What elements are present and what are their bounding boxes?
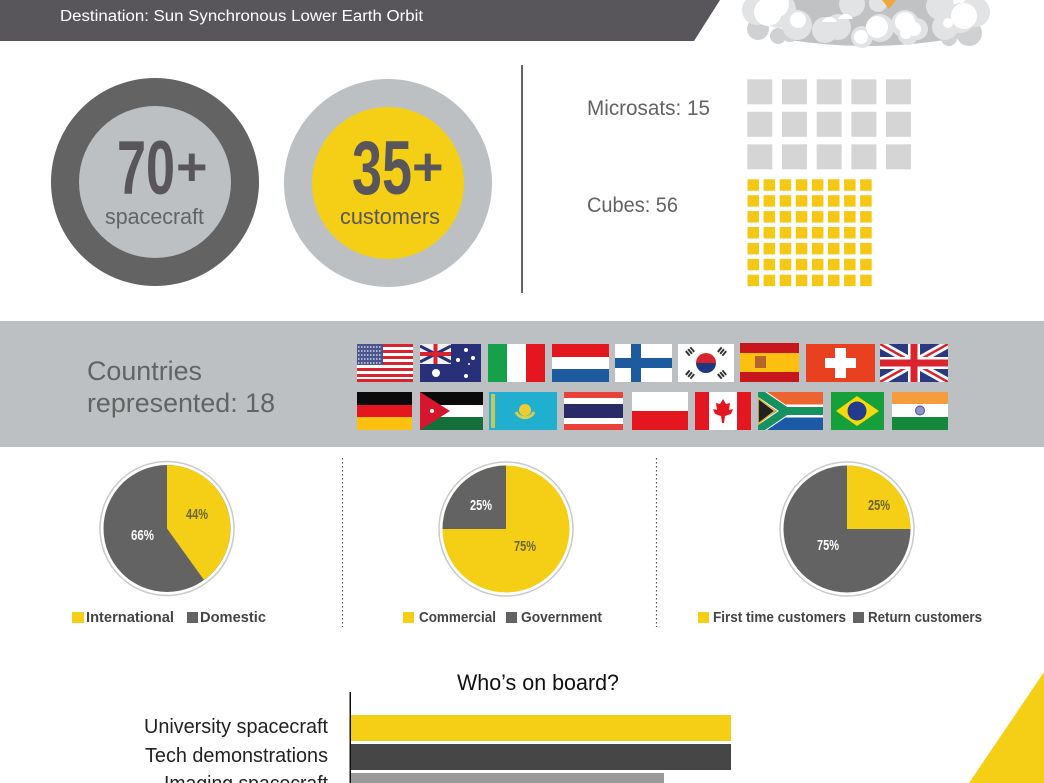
pie chart: first time vs return customers: 25%	[868, 497, 890, 514]
heading: countries represented: Countries	[87, 356, 202, 386]
pie chart: international vs domestic: 66%	[131, 527, 154, 544]
pie chart: first time vs return customers	[780, 462, 914, 596]
label: cubes: Cubes: 56	[587, 194, 678, 217]
stat: 35+ customers: 35	[352, 126, 412, 211]
pie chart: first time vs return customers: 75%	[817, 537, 839, 554]
flag: South Africa	[758, 392, 823, 430]
legend: international vs domestic: International	[86, 610, 174, 626]
flag: India	[892, 392, 948, 430]
flag: Switzerland	[806, 344, 875, 382]
bar chart: who's on board: University spacecraft	[144, 716, 328, 738]
banner: destination	[0, 0, 720, 41]
flag: Finland	[615, 344, 672, 382]
flag: Canada	[695, 392, 751, 430]
legend: commercial vs government: Government	[521, 610, 602, 626]
legend: commercial vs government	[403, 610, 602, 626]
stat: 70+ spacecraft: +	[176, 137, 208, 197]
flag: Jordan	[420, 392, 483, 430]
legend: first time vs return customers: First time customers	[713, 610, 846, 626]
icon: rocket exhaust cloud	[742, 0, 990, 48]
heading: who's on board: Who’s on board?	[457, 670, 619, 695]
label: microsats: Microsats: 15	[587, 97, 710, 120]
flag: Spain	[740, 343, 799, 382]
bar chart: who's on board: Tech demonstrations	[145, 745, 328, 767]
pie chart: commercial vs government	[439, 462, 573, 596]
pie chart: commercial vs government: 75%	[514, 538, 536, 555]
stat: 70+ spacecraft: spacecraft	[105, 204, 204, 229]
flag: Poland	[632, 392, 688, 430]
stat: 70+ spacecraft	[51, 78, 259, 286]
flag: Australia	[420, 344, 481, 382]
flag: Thailand	[564, 392, 623, 430]
decorative corner triangle	[969, 672, 1044, 783]
legend: international vs domestic	[72, 610, 266, 626]
heading: countries represented: represented: 18	[87, 388, 275, 418]
icon grid: microsats	[747, 79, 911, 169]
legend: commercial vs government: Commercial	[419, 610, 496, 626]
stat: 35+ customers: customers	[340, 204, 440, 229]
stat: 35+ customers: +	[412, 137, 444, 197]
flag: South Korea	[678, 344, 734, 382]
flag: USA	[357, 344, 413, 382]
legend: international vs domestic: Domestic	[200, 610, 266, 626]
bar chart: who's on board	[144, 692, 731, 783]
pie chart: international vs domestic: 44%	[186, 506, 208, 523]
flag: Netherlands	[552, 344, 609, 382]
pie chart: international vs domestic	[100, 462, 234, 596]
legend: first time vs return customers: Return customers	[868, 610, 982, 626]
flag: United Kingdom	[880, 344, 948, 382]
banner: destination: Destination: Sun Synchronous Lower Earth Orbit	[60, 8, 424, 25]
pie chart: commercial vs government: 25%	[470, 497, 492, 514]
flag: Germany	[357, 392, 412, 430]
flag: Italy	[488, 344, 545, 382]
flag: Kazakhstan	[489, 392, 557, 430]
stat: 70+ spacecraft: 70	[117, 126, 175, 211]
legend: first time vs return customers	[698, 610, 982, 626]
stat: 35+ customers	[284, 79, 492, 287]
panel: countries represented	[0, 321, 1044, 447]
icon grid: cubes	[748, 179, 872, 286]
flag: Brazil	[831, 392, 884, 430]
heading: countries represented	[87, 356, 275, 418]
